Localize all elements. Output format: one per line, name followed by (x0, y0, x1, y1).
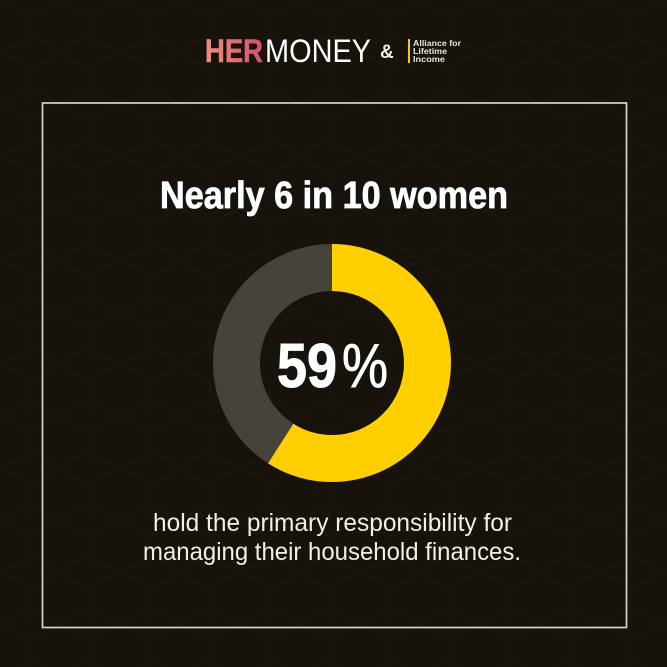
frame (42, 103, 626, 628)
donut value: 59 (277, 332, 337, 401)
caption: managing their household finances. (143, 538, 521, 566)
donut value: % (342, 332, 388, 401)
logo: Alliance for Lifetime Income: Alliance for (413, 38, 462, 48)
donut chart: 59% (236, 268, 428, 458)
caption (143, 509, 521, 566)
donut value (277, 332, 388, 401)
logo: Alliance for Lifetime Income: Income (413, 54, 445, 64)
logo: HerMoney: HER (205, 33, 263, 69)
logo: Alliance for Lifetime Income: Lifetime (413, 46, 447, 56)
logo: HerMoney (205, 33, 371, 69)
ampersand: & (380, 42, 394, 63)
title: Nearly 6 in 10 women (160, 175, 508, 217)
logo: Alliance for Lifetime Income (408, 38, 462, 64)
caption: hold the primary responsibility for (153, 509, 512, 537)
logo: HerMoney: MONEY (265, 33, 371, 69)
